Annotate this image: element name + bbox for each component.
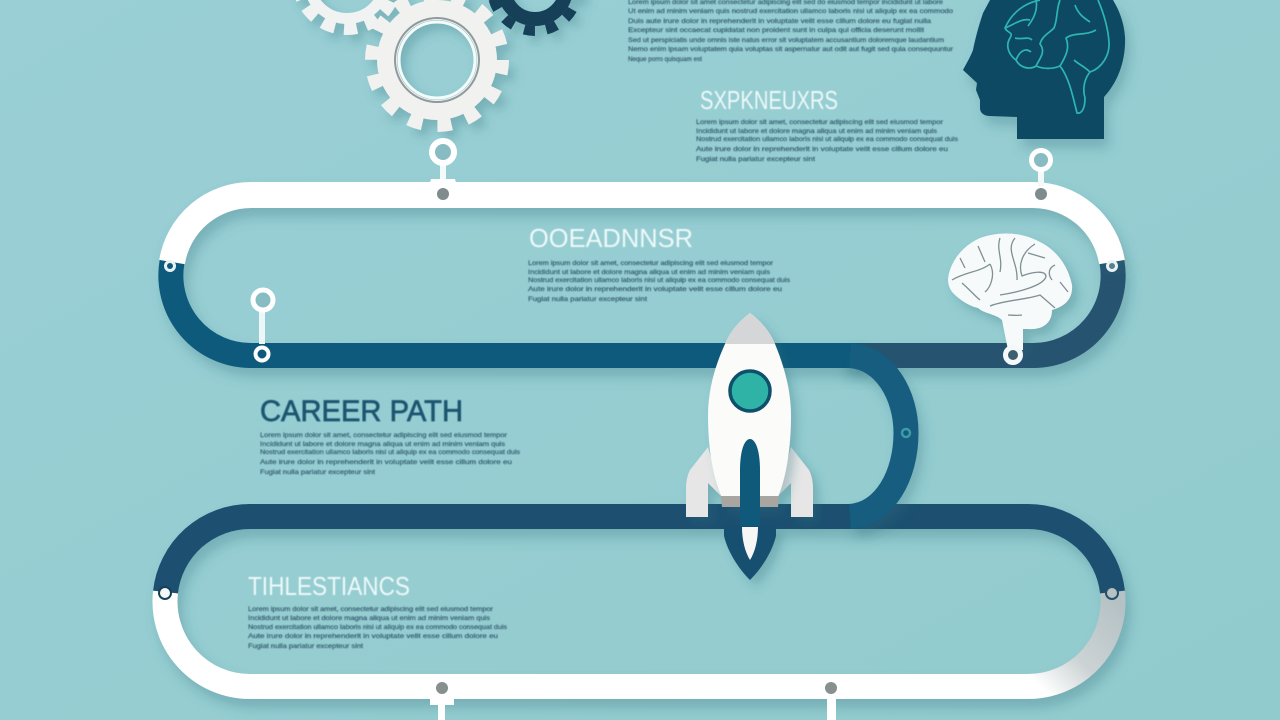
path: D-shaped connector curve [850, 356, 906, 516]
text block: fourth section: Aute irure dolor in reprehenderit in voluptate velit esse cillum dolore eu [248, 634, 498, 640]
node: D curve [902, 429, 910, 437]
heading: OOEADNNSR: OOEADNNSR [529, 223, 693, 253]
top text block: Excepteur sint occaecat cupidatat non proident sunt in culpa qui officia deserunt mollit [628, 28, 924, 34]
heading: career path: CAREER PATH [260, 395, 463, 428]
node: lower right [1106, 587, 1118, 599]
text block: fourth section: Fugiat nulla pariatur excepteur sint [248, 644, 363, 650]
rocket flame [742, 527, 758, 560]
lower loop faded right section [1028, 592, 1113, 686]
text block: career path [260, 433, 520, 476]
text block: fourth section [248, 607, 507, 650]
gear: upper right dark [492, 0, 578, 31]
rocket fins [686, 447, 813, 517]
rocket tail [724, 525, 776, 580]
rocket window [730, 371, 770, 411]
pin: head connector [1032, 150, 1050, 200]
rocket nose cone [725, 313, 775, 344]
text block: second section: Incididunt ut labore et dolore magna aliqua ut enim ad minim veniam quis [696, 129, 937, 135]
top text block: Duis aute irure dolor in reprehenderit in voluptate velit esse cillum dolore eu fugiat nulla [628, 19, 932, 25]
brain folds [952, 238, 1068, 315]
rocket center fin [740, 439, 760, 526]
text block: third section: Nostrud exercitation ullamco laboris nisi ut aliquip ex ea commodo consequat duis [528, 278, 790, 284]
icon: white brain [948, 233, 1072, 362]
icon: rocket [686, 313, 813, 580]
text block: third section: Incididunt ut labore et dolore magna aliqua ut enim ad minim veniam quis [528, 270, 770, 276]
text block: second section: Nostrud exercitation ullamco laboris nisi ut aliquip ex ea commodo consequat duis [696, 137, 958, 143]
text block: third section [528, 261, 790, 303]
upper loop white upper section [172, 195, 1112, 262]
lower loop dark upper section [166, 516, 1112, 592]
gears illustration [298, 0, 578, 125]
text block: second section [696, 120, 958, 163]
path: right slate segment [840, 262, 1113, 356]
text block: third section: Fugiat nulla pariatur excepteur sint [528, 297, 647, 303]
pin: lower loop left [430, 682, 454, 720]
path: lower loop [165, 516, 1113, 686]
head silhouette [963, 0, 1125, 139]
top text block: Lorem ipsum dolor sit amet consectetur adipiscing elit sed do eiusmod tempor incididunt ut labore [628, 0, 944, 6]
top text block: Neque porro quisquam est [628, 57, 702, 63]
icon: head with brain [963, 0, 1125, 139]
node: upper left [166, 262, 174, 270]
heading: SXPKNEUXRS: SXPKNEUXRS [700, 85, 838, 115]
text block: third section: Lorem ipsum dolor sit amet, consectetur adipiscing elit sed eiusmod tempor [528, 261, 773, 267]
text block: third section: Aute irure dolor in reprehenderit in voluptate velit esse cillum dolore eu [528, 287, 782, 293]
brain silhouette [948, 233, 1072, 350]
text block: second section: Lorem ipsum dolor sit amet, consectetur adipiscing elit sed eiusmod tempor [696, 120, 943, 126]
upper loop dark lower section [171, 262, 860, 356]
top text block: Ut enim ad minim veniam quis nostrud exercitation ullamco laboris nisi ut aliquip ex ea commodo [628, 9, 954, 15]
brain stem node [1006, 348, 1020, 362]
heading: TIHLESTIANCS: TIHLESTIANCS [248, 571, 410, 601]
gear: large white [372, 0, 502, 125]
rocket body [708, 313, 791, 507]
text block: career path: Incididunt ut labore et dolore magna aliqua ut enim ad minim veniam quis [260, 442, 505, 448]
path: upper loop [171, 195, 1112, 356]
top text block [628, 0, 954, 63]
text block: career path: Lorem ipsum dolor sit amet, consectetur adipiscing elit sed eiusmod tempor [260, 433, 507, 439]
top text block: Sed ut perspiciatis unde omnis iste natus error sit voluptatem accusantium doloremque laudantium [628, 38, 944, 44]
gear: upper left white [298, 0, 396, 29]
text block: career path: Fugiat nulla pariatur excepteur sint [260, 470, 375, 476]
text block: career path: Nostrud exercitation ullamco laboris nisi ut aliquip ex ea commodo consequat duis [260, 450, 520, 456]
top text block: Nemo enim ipsam voluptatem quia voluptas sit aspernatur aut odit aut fugit sed quia consequuntur [628, 47, 953, 53]
pin: lower loop right [825, 682, 837, 720]
pin: gear connector [428, 141, 458, 200]
pin: left upper loop [253, 290, 273, 360]
node: lower left [159, 587, 171, 599]
node: upper right [1108, 262, 1116, 270]
text block: career path: Aute irure dolor in reprehenderit in voluptate velit esse cillum dolore eu [260, 460, 512, 466]
text block: second section: Fugiat nulla pariatur excepteur sint [696, 157, 815, 163]
text block: fourth section: Nostrud exercitation ullamco laboris nisi ut aliquip ex ea commodo consequat duis [248, 625, 507, 631]
text block: fourth section: Lorem ipsum dolor sit amet, consectetur adipiscing elit sed eiusmod tempor [248, 607, 493, 613]
rocket base band [721, 496, 779, 507]
lower loop white lower section [165, 592, 1028, 686]
text block: fourth section: Incididunt ut labore et dolore magna aliqua ut enim ad minim veniam quis [248, 616, 490, 622]
text block: second section: Aute irure dolor in reprehenderit in voluptate velit esse cillum dolore eu [696, 147, 948, 153]
brain outline [1005, 0, 1109, 113]
